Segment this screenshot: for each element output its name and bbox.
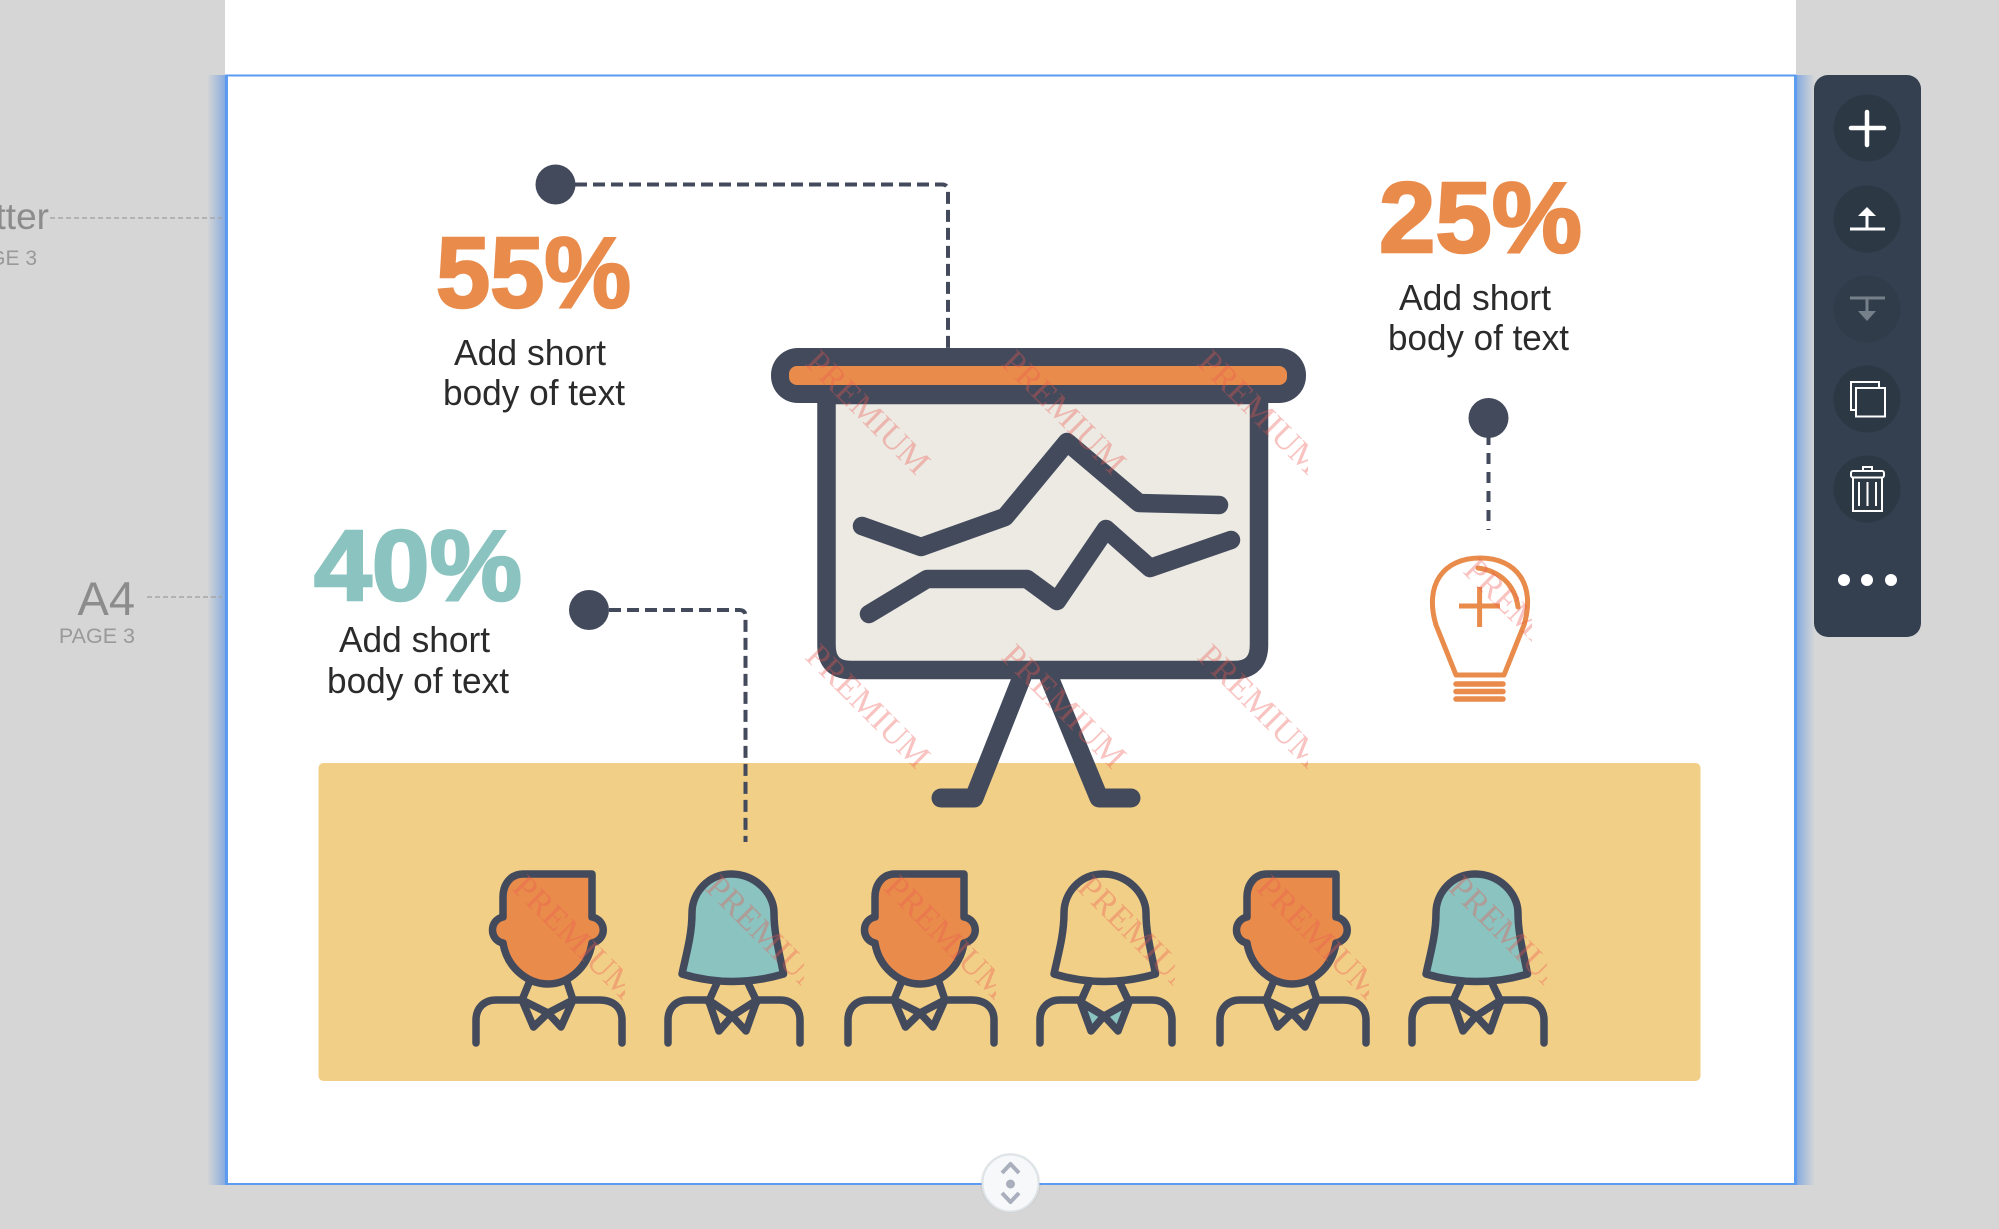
watermark: person 4: PREMIUM <box>1070 868 1209 1007</box>
screen stand <box>941 677 1131 798</box>
roller bar <box>771 348 1306 403</box>
watermarks: screen: PREMIUM <box>994 637 1133 776</box>
callout: 25 percent <box>1379 162 1582 358</box>
roller highlight <box>789 366 1287 385</box>
screen panel <box>826 395 1259 670</box>
toolbar panel <box>1814 75 1921 637</box>
presentation screen <box>771 348 1306 798</box>
watermark: person 1: PREMIUM <box>505 868 644 1007</box>
callout: 40 percent: body of text <box>327 660 509 701</box>
callout: 25 percent: body of text <box>1388 317 1569 358</box>
button: move page down (disabled) <box>1834 276 1900 342</box>
button: duplicate page <box>1834 366 1900 432</box>
button: more options <box>1838 574 1897 586</box>
callout: 55 percent: Add short <box>454 332 606 373</box>
connector: 25 percent to bulb <box>1468 398 1508 530</box>
callout: 55 percent <box>436 217 631 413</box>
callout: 55 percent: 55% <box>436 217 631 329</box>
watermark: person 3: PREMIUM <box>877 868 1016 1007</box>
page side glow right <box>1797 75 1815 1185</box>
watermark: person 6: PREMIUM <box>1441 868 1580 1007</box>
page side glow left <box>207 75 225 1185</box>
watermarks: screen: PREMIUM <box>798 343 937 482</box>
page label: A4: PAGE 3 <box>59 624 135 648</box>
callout: 25 percent: Add short <box>1399 277 1551 318</box>
selected page <box>226 76 1795 1184</box>
callout: 40 percent <box>314 510 522 701</box>
page label: A4: A4 <box>78 572 135 625</box>
watermarks: screen <box>798 343 1329 776</box>
watermarks: screen: PREMIUM <box>994 343 1133 482</box>
yellow stage panel <box>318 763 1700 1081</box>
watermark: person 2: PREMIUM <box>698 868 837 1007</box>
button: move page up <box>1834 186 1900 252</box>
person 1: man <box>476 874 622 1043</box>
person 4: woman with teal collar <box>1040 874 1172 1043</box>
page label: A4 <box>59 572 222 648</box>
person 5: man <box>1220 874 1366 1043</box>
watermarks: screen: PREMIUM <box>1190 343 1329 482</box>
callout: 40 percent: Add short <box>339 619 490 660</box>
callout: 55 percent: body of text <box>443 372 625 413</box>
page resize handle <box>980 1153 1040 1213</box>
previous page strip <box>225 0 1796 76</box>
button: add page <box>1834 94 1900 162</box>
watermarks: screen: PREMIUM <box>798 637 937 776</box>
person 6: woman <box>1412 874 1544 1043</box>
line chart <box>862 442 1231 614</box>
page label: letter <box>0 196 222 270</box>
button: delete page <box>1834 456 1900 522</box>
watermarks: screen: PREMIUM <box>1190 637 1329 776</box>
callout: 40 percent: 40% <box>314 510 522 622</box>
watermark: person 5: PREMIUM <box>1249 868 1388 1007</box>
person 2: woman <box>668 874 800 1043</box>
watermark: bulb: PREMIUM <box>1456 551 1595 690</box>
person 3: man <box>848 874 994 1043</box>
callout: 25 percent: 25% <box>1379 162 1582 274</box>
connector: 55 percent to screen <box>536 164 948 348</box>
connector: 40 percent to audience <box>569 590 746 842</box>
icon: light bulb <box>1432 558 1528 699</box>
